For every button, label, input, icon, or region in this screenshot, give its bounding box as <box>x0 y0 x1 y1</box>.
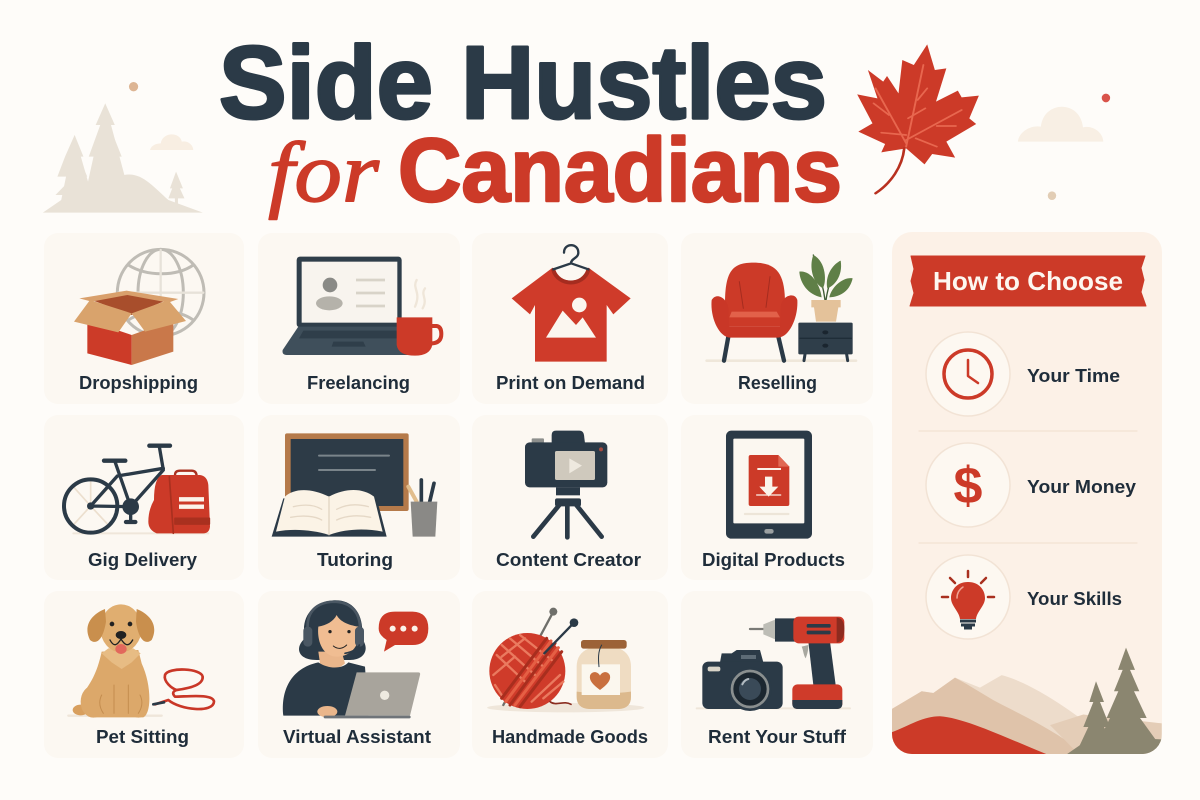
label: Print on Demand: Print on Demand <box>496 373 645 393</box>
label: Your Time: Your Time <box>1027 366 1120 386</box>
title: Canadians <box>398 121 842 221</box>
card: Dropshipping <box>44 233 244 404</box>
banner: How to Choose: How to Choose <box>933 266 1123 296</box>
icon: t-shirt on hanger <box>512 245 631 362</box>
icon: tablet with download file <box>726 431 812 539</box>
title <box>219 25 842 221</box>
label: Content Creator: Content Creator <box>496 550 641 570</box>
card: Digital Products <box>681 415 873 580</box>
decoration: right cloud and dots <box>1018 94 1110 200</box>
icon: box and globe <box>74 249 204 365</box>
title: for <box>268 124 380 220</box>
item: Your Skills <box>926 555 1122 639</box>
item: Your Money <box>926 443 1136 527</box>
banner: How to Choose <box>910 256 1146 306</box>
label: Your Skills: Your Skills <box>1027 589 1122 609</box>
label: Handmade Goods: Handmade Goods <box>492 727 648 747</box>
icon: clock <box>944 350 992 398</box>
card: Gig Delivery <box>44 415 244 580</box>
panel: How to Choose <box>892 232 1162 756</box>
icon: camera and power drill <box>697 617 850 711</box>
label: Rent Your Stuff: Rent Your Stuff <box>708 727 847 747</box>
icon: camera on tripod <box>525 431 607 537</box>
card: Pet Sitting <box>44 591 244 758</box>
icon: dollar sign: $ <box>954 457 983 515</box>
label: Tutoring: Tutoring <box>317 550 393 570</box>
card: Freelancing <box>258 233 460 404</box>
icon: bicycle and delivery bag <box>64 446 210 533</box>
card: Content Creator <box>472 415 668 580</box>
mountains and trees scene <box>892 648 1162 756</box>
label: Dropshipping: Dropshipping <box>79 373 198 393</box>
icon: maple leaf <box>857 44 979 193</box>
icon: yarn ball and candle jar <box>487 608 644 712</box>
label: Gig Delivery: Gig Delivery <box>88 550 197 570</box>
card: Handmade Goods <box>472 591 668 758</box>
label: Virtual Assistant: Virtual Assistant <box>283 727 431 747</box>
item: Your Time <box>926 332 1120 416</box>
card: Tutoring <box>258 415 460 580</box>
decoration: left trees, hill, cloud <box>43 82 203 213</box>
icon: chalkboard, book and pencil cup <box>272 433 437 537</box>
icon: light bulb <box>942 571 994 628</box>
card: Reselling <box>681 233 873 404</box>
icon: laptop and mug <box>282 257 441 356</box>
label: Your Money: Your Money <box>1027 477 1136 497</box>
label: Digital Products: Digital Products <box>702 550 845 570</box>
label: Freelancing: Freelancing <box>307 373 410 393</box>
title: Side Hustles <box>219 25 827 140</box>
icon: dog and leash <box>68 604 214 718</box>
label: Reselling: Reselling <box>738 373 817 393</box>
card: Rent Your Stuff <box>681 591 873 758</box>
icon: woman with headset and laptop <box>283 600 428 717</box>
icon: armchair, plant and nightstand <box>707 255 856 361</box>
label: Pet Sitting: Pet Sitting <box>96 727 189 747</box>
card: Print on Demand <box>472 233 668 404</box>
card: Virtual Assistant <box>258 591 460 758</box>
